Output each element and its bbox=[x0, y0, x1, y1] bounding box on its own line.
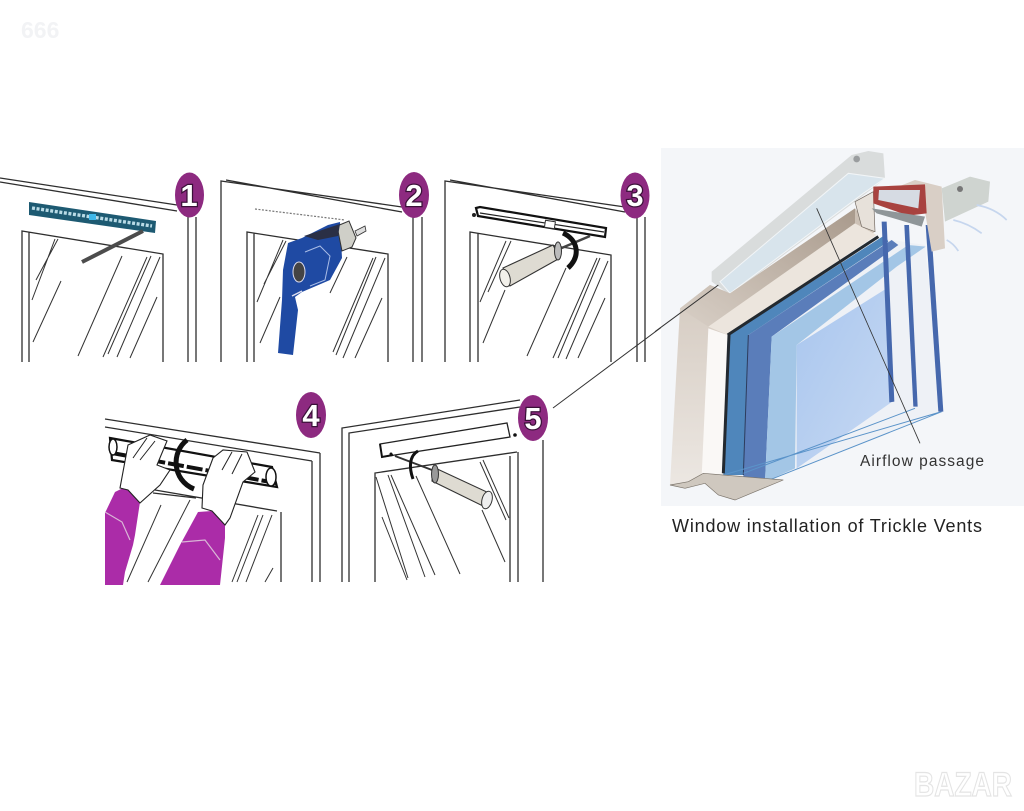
vent rim bbox=[712, 151, 885, 295]
curved arrow bbox=[176, 440, 194, 489]
bottom profile bbox=[670, 473, 783, 500]
top profile bbox=[855, 192, 875, 232]
curved arrow bbox=[563, 233, 576, 268]
curved arrow bbox=[410, 451, 418, 479]
panel: window cross-section bbox=[655, 148, 1024, 506]
icon: drill bbox=[278, 221, 366, 355]
screwdriver bbox=[395, 456, 494, 510]
glass panes bbox=[723, 238, 942, 482]
badge 4: 4 bbox=[302, 398, 320, 433]
badge 4 bbox=[296, 392, 326, 438]
badge 2 bbox=[399, 172, 429, 218]
vent rail bbox=[109, 438, 277, 487]
panel: step 4 bbox=[105, 392, 326, 585]
image background bbox=[661, 148, 1024, 506]
window frame 1 bbox=[0, 178, 196, 362]
window frame 4 bbox=[105, 419, 320, 582]
panel: step 3 bbox=[445, 172, 650, 362]
panel: step 5 bbox=[342, 395, 548, 582]
window frame 2 bbox=[221, 180, 422, 362]
window frame 3 bbox=[445, 180, 645, 362]
badge 3 bbox=[620, 172, 650, 218]
vent cylinder bbox=[380, 423, 517, 457]
vent rail bbox=[472, 207, 606, 237]
window frame 5 bbox=[342, 400, 543, 582]
screwdriver bbox=[82, 231, 143, 262]
icon: sleeves bbox=[105, 487, 225, 585]
beige frame bbox=[670, 208, 875, 485]
icon: left hand bbox=[120, 435, 170, 503]
connector line bbox=[553, 285, 718, 408]
badge 1 bbox=[175, 172, 204, 218]
icon: right hand bbox=[202, 450, 255, 525]
badge 5 bbox=[518, 395, 548, 441]
pane edges bbox=[882, 222, 894, 402]
window illustration bbox=[655, 151, 1007, 500]
caption: Window installation of Trickle Vents bbox=[672, 516, 982, 536]
badge 5: 5 bbox=[524, 401, 542, 436]
watermark: 666: 666 bbox=[21, 17, 59, 43]
badge 3: 3 bbox=[626, 178, 644, 213]
panel: step 1 bbox=[0, 172, 204, 362]
panel: step 2 bbox=[221, 172, 429, 362]
screwdriver bbox=[498, 236, 590, 288]
badge 2: 2 bbox=[405, 178, 423, 213]
drill holes bbox=[255, 209, 345, 220]
vent strip bbox=[29, 202, 156, 233]
badge 1: 1 bbox=[180, 178, 198, 213]
label: airflow passage: Airflow passage bbox=[860, 453, 984, 470]
